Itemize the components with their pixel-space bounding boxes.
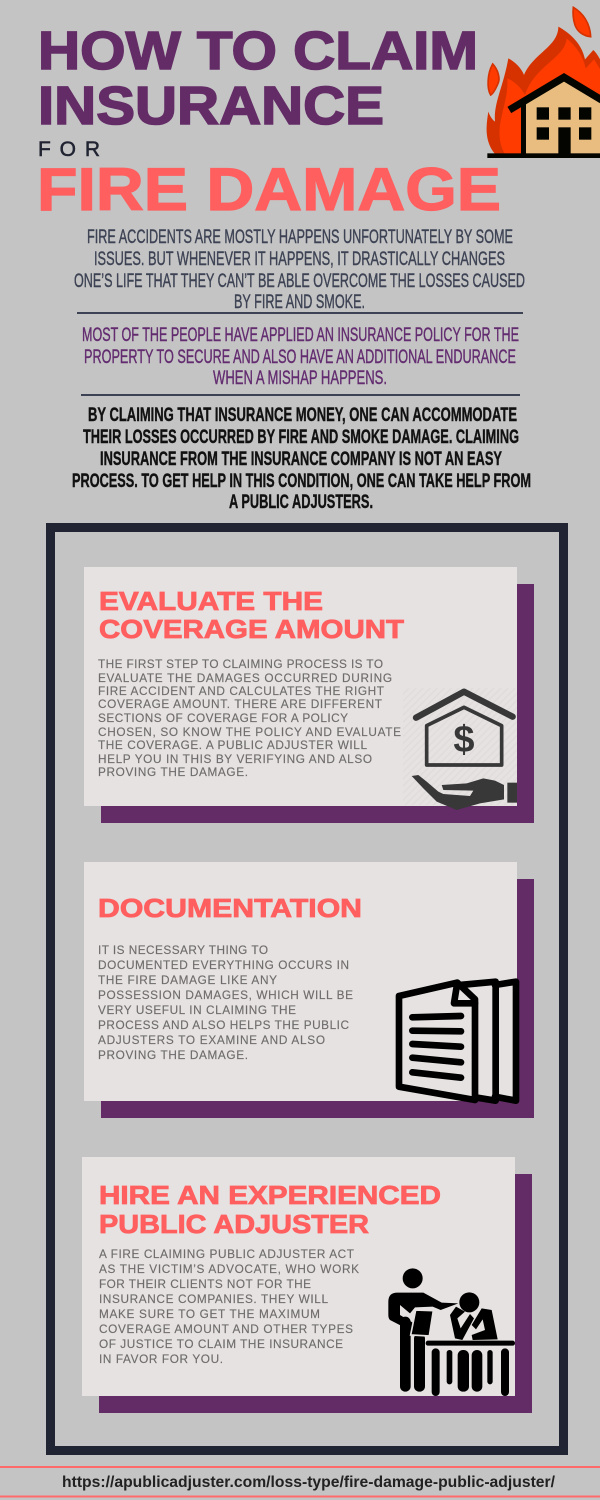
heading: documentation: DOCUMENTATION [98,893,362,923]
icon: burning house [487,7,600,158]
body text: hire: COVERAGE AMOUNT AND OTHER TYPES [99,1322,353,1336]
body text: hire: AS THE VICTIM’S ADVOCATE, WHO WORK [99,1262,359,1276]
body text: documentation: IT IS NECESSARY THING TO [98,943,268,957]
panel: documentation [84,862,534,1118]
intro paragraph: black: A PUBLIC ADJUSTERS. [229,491,373,513]
body text: documentation: PROVING THE DAMAGE. [98,1048,248,1062]
body text: hire: A FIRE CLAIMING PUBLIC ADJUSTER ACT [99,1247,354,1261]
body text: documentation: THE FIRE DAMAGE LIKE ANY [98,973,277,987]
body text: documentation: DOCUMENTED EVERYTHING OCCURS IN [98,958,349,972]
intro paragraph: purple: WHEN A MISHAP HAPPENS. [213,367,387,389]
intro paragraph: purple [82,324,519,389]
footer rules [0,1466,600,1498]
body text: documentation: VERY USEFUL IN CLAIMING THE [98,1003,296,1017]
title line: for: FOR [38,138,100,161]
body text: evaluate: FIRE ACCIDENT AND CALCULATES THE RIGHT [98,684,384,698]
body text: hire: MAKE SURE TO GET THE MAXIMUM [99,1307,320,1321]
icon: house in hand [403,688,517,810]
body text: evaluate: COVERAGE AMOUNT. THERE ARE DIFFERENT [98,697,382,711]
body text: evaluate: PROVING THE DAMAGE. [98,765,248,779]
title line: insurance: INSURANCE [38,77,384,136]
body text: evaluate: HELP YOU IN THIS BY VERIFYING AND ALSO [98,752,372,766]
icon: adjuster and client at desk [388,1268,515,1396]
body text: hire [99,1247,359,1366]
body text: documentation: PROCESS AND ALSO HELPS THE PUBLIC [98,1018,349,1032]
body text: evaluate: THE FIRST STEP TO CLAIMING PROCESS IS TO [98,657,383,671]
body text: documentation [98,943,353,1062]
body text: documentation: POSSESSION DAMAGES, WHICH WILL BE [98,988,353,1002]
icon: house in hand: $ [453,719,475,761]
heading: evaluate: COVERAGE AMOUNT [99,614,404,644]
icon: stacked documents [399,982,516,1101]
heading: evaluate: EVALUATE THE [99,586,323,616]
panel: hire an experienced public adjuster [82,1157,532,1413]
outer frame [50,528,564,1450]
intro paragraph: grey [74,226,525,313]
body text: documentation: ADJUSTERS TO EXAMINE AND ALSO [98,1033,325,1047]
title line: fire damage: FIRE DAMAGE [37,156,501,223]
body text: hire: IN FAVOR FOR YOU. [99,1352,223,1366]
title line: how to claim: HOW TO CLAIM [38,22,478,81]
title [37,22,501,223]
body text: hire: INSURANCE COMPANIES. THEY WILL [99,1292,328,1306]
intro paragraph: grey: BY FIRE AND SMOKE. [234,291,365,313]
panel: evaluate the coverage amount [84,567,534,823]
footer url: https://apublicadjuster.com/loss-type/fire-damage-public-adjuster/ [62,1474,556,1491]
heading: hire: HIRE AN EXPERIENCED [99,1180,441,1210]
body text: evaluate: THE COVERAGE. A PUBLIC ADJUSTER WILL [98,738,367,752]
heading: hire [99,1180,441,1239]
heading: evaluate [99,586,404,644]
body text: hire: FOR THEIR CLIENTS NOT FOR THE [99,1277,311,1291]
body text: evaluate: SECTIONS OF COVERAGE FOR A POLICY [98,711,348,725]
heading: hire: PUBLIC ADJUSTER [99,1209,369,1239]
body text: evaluate: EVALUATE THE DAMAGES OCCURRED DURING [98,671,392,685]
body text: evaluate: CHOSEN, SO KNOW THE POLICY AND EVALUATE [98,725,401,739]
body text: hire: OF JUSTICE TO CLAIM THE INSURANCE [99,1337,343,1351]
intro paragraph: black [72,404,531,513]
body text: evaluate [98,657,401,779]
